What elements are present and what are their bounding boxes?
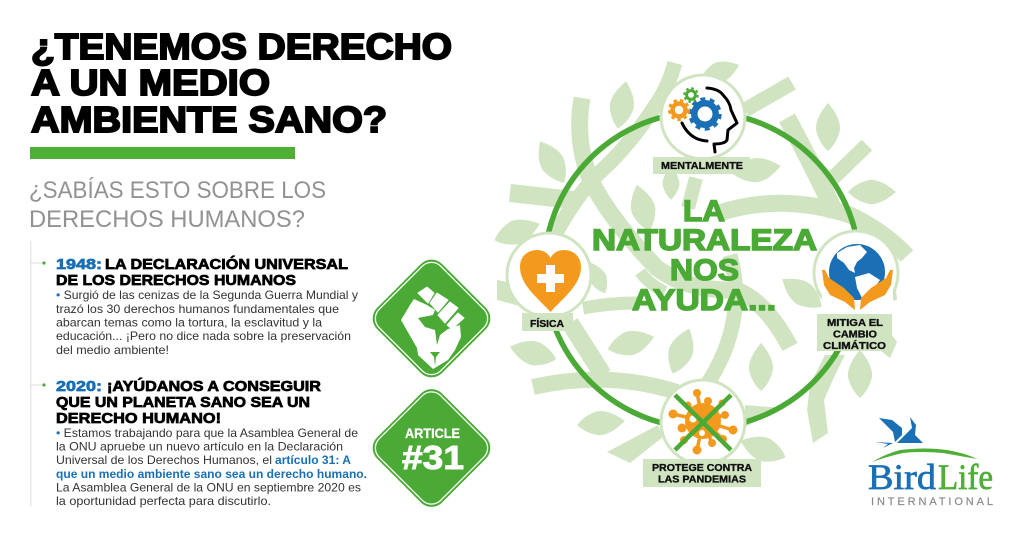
central headline: NOS [670, 254, 739, 287]
central headline [592, 195, 817, 317]
body: 1948: abarcan temas como la tortura, la esclavitud y la [56, 316, 322, 330]
label: cambio climático: CAMBIO [833, 330, 877, 340]
body: 2020 [56, 426, 367, 508]
tree background [490, 55, 907, 469]
icon: article 31 diamond: ARTICLE [405, 425, 460, 441]
green title bar [30, 147, 295, 159]
node: cambio climático [814, 231, 898, 352]
central headline: NATURALEZA [592, 224, 817, 257]
logo wordmark: Life [938, 457, 993, 497]
body: 2020: que un medio ambiente sano sea un derecho humano. [56, 467, 367, 481]
central headline: LA [683, 195, 725, 228]
subtitle: DERECHOS HUMANOS? [29, 206, 305, 233]
heading: 2020: DERECHO HUMANO! [56, 411, 221, 427]
timeline [30, 241, 46, 506]
label: física: FÍSICA [530, 317, 564, 330]
label: cambio climático: MITIGA EL [827, 318, 883, 329]
text block: 2020 [56, 377, 367, 508]
icon: fist diamond [366, 253, 497, 384]
heading: 1948 [56, 255, 348, 289]
heading: 2020: QUE UN PLANETA SANO SEA UN [56, 395, 310, 411]
body: 1948: • Surgió de las cenizas de la Segunda Guerra Mundial y [56, 288, 358, 302]
green ring [544, 112, 860, 428]
label: pandemias [643, 459, 761, 487]
node: física [507, 233, 591, 331]
heading: 2020: 2020: [56, 379, 102, 395]
body: 1948: educación... ¡Pero no dice nada sobre la preservación [56, 329, 351, 343]
icon: heart with cross [520, 250, 581, 312]
body: 1948 [56, 288, 358, 357]
logo wordmark: Bird [868, 457, 936, 497]
logo subtitle: INTERNATIONAL [871, 496, 993, 508]
body: 2020: La Asamblea General de la ONU en septiembre 2020 es [56, 480, 361, 494]
title: AMBIENTE SANO? [31, 99, 387, 140]
title: A UN MEDIO [31, 62, 270, 103]
node: mentalmente [653, 75, 750, 174]
heading: 1948: 1948: [56, 257, 102, 273]
node: pandemias [643, 380, 761, 487]
body: 2020: • Estamos trabajando para que la Asamblea General de [56, 426, 358, 440]
title [31, 26, 452, 140]
text block: 1948 [56, 255, 358, 357]
label: cambio climático [817, 314, 892, 352]
body: 2020: la ONU apruebe un nuevo artículo en la Declaración [56, 440, 343, 454]
body: 1948: trazó los 30 derechos humanos fundamentales que [56, 302, 339, 316]
label: pandemias: LAS PANDEMIAS [658, 474, 746, 486]
subtitle: ¿SABÍAS ESTO SOBRE LOS [29, 177, 326, 204]
label: mentalmente: MENTALMENTE [661, 161, 743, 172]
central headline: AYUDA... [632, 284, 776, 317]
logo arc [872, 448, 977, 462]
body: 2020: Universal de los Derechos Humanos, el [56, 453, 272, 467]
subtitle [29, 177, 326, 233]
label: pandemias: PROTEGE CONTRA [652, 463, 752, 474]
heading: 1948: DE LOS DERECHOS HUMANOS [56, 273, 296, 289]
body: 1948: del medio ambiente! [56, 343, 169, 357]
icon: article 31 diamond: #31 [402, 439, 464, 476]
icon: globe in hands [822, 244, 893, 315]
heading: 1948: LA DECLARACIÓN UNIVERSAL [105, 255, 348, 273]
title: ¿TENEMOS DERECHO [31, 26, 452, 67]
body: 2020: artículo 31: A [275, 453, 351, 467]
body: 2020: la oportunidad perfecta para discutirlo. [56, 494, 271, 508]
heading: 2020: ¡AYÚDANOS A CONSEGUIR [107, 377, 322, 395]
logo wordmark [868, 457, 993, 497]
icon: bird [875, 417, 923, 448]
icon: article 31 diamond [366, 383, 497, 513]
heading: 2020 [56, 377, 322, 427]
icon: crossed-out virus [668, 389, 738, 454]
logo: BirdLife International [868, 417, 993, 508]
icon: head with gears [669, 88, 737, 152]
label: cambio climático: CLIMÁTICO [823, 339, 886, 352]
